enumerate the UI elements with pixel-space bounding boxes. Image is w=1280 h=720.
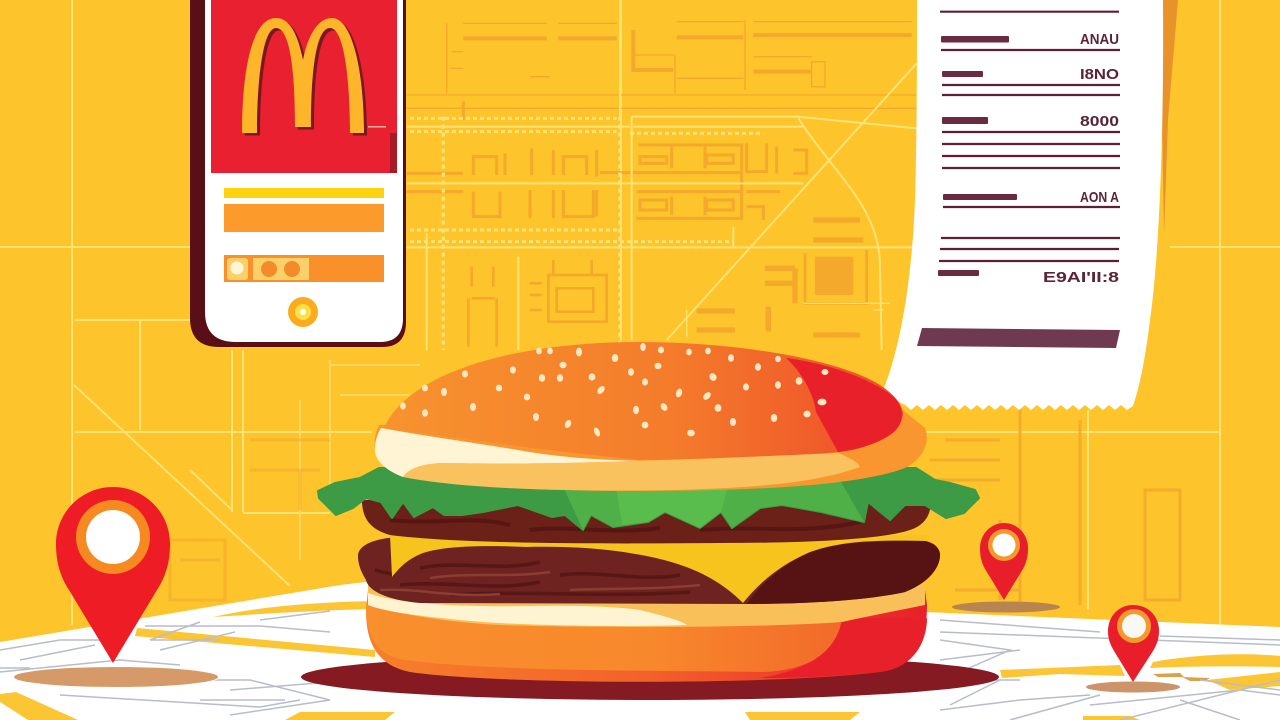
golden arches logo [242,18,367,136]
location pin small [1086,605,1180,692]
app orange bar [224,204,384,232]
cream layer [375,428,640,477]
app option row [224,255,384,282]
bottom patty [358,537,940,604]
receipt text: ANAU [1080,31,1119,48]
top patty [362,500,931,543]
receipt lines [939,12,1120,261]
grey map street lines [0,611,1280,720]
receipt text: AON A [1080,189,1119,206]
phone [190,0,406,347]
bottom bun cream [368,593,687,626]
location pin medium [952,523,1060,612]
bottom bun top band [368,585,925,627]
receipt bars [938,36,1017,276]
patty texture [375,562,690,595]
yellow map roads [0,601,1280,720]
receipt [883,0,1178,410]
top bun [375,342,927,491]
receipt paper [883,0,1163,410]
hamburger [301,342,999,700]
tan layer [403,453,860,491]
map ground [0,578,1280,720]
app yellow bar [224,188,384,198]
lettuce [318,468,979,530]
red highlight [786,358,902,452]
sesame seeds [400,343,828,437]
receipt total bar [917,328,1120,348]
plate shadow [301,654,999,700]
receipt shadow edge [1160,0,1178,235]
receipt text: E9AI'II:8 [1043,269,1119,286]
location pin large [12,487,220,688]
cheese [390,535,929,603]
phone body [190,0,406,347]
bun dome [384,342,903,460]
receipt text: I8NO [1080,66,1119,83]
bottom bun [366,585,927,682]
receipt text: 8000 [1080,113,1119,130]
bun base [375,410,927,491]
receipt text [1043,31,1119,286]
app button [288,297,318,327]
app header [211,0,397,173]
